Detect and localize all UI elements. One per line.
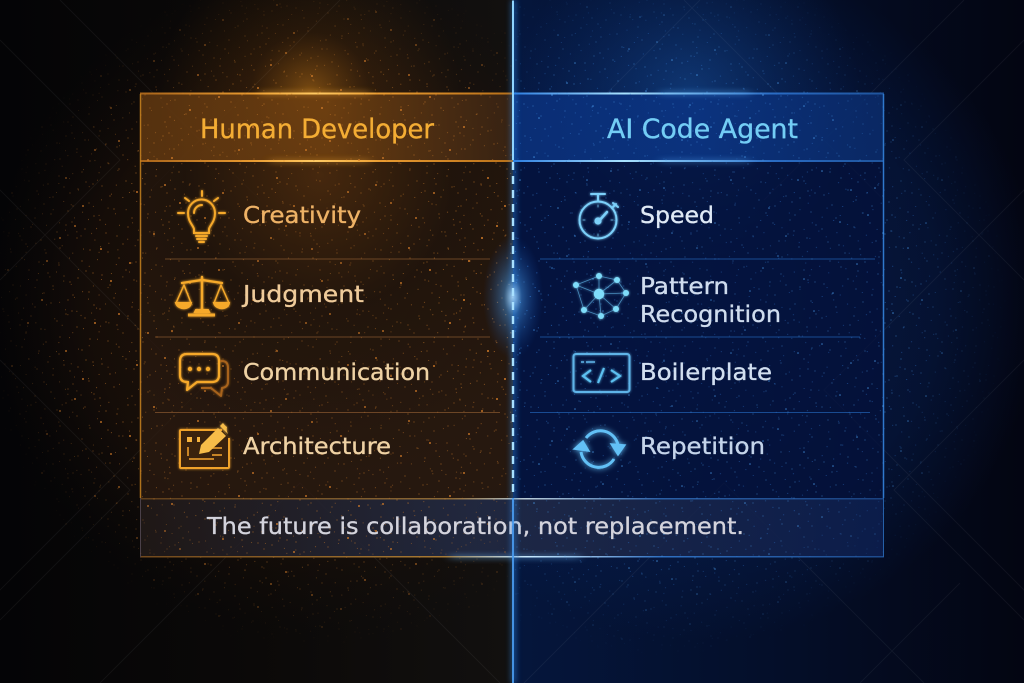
icon: code window — [574, 354, 630, 392]
icon: network nodes — [573, 273, 629, 319]
row: Boilerplate — [574, 354, 772, 392]
row: Repetition — [574, 431, 765, 467]
panel backgrounds: column fills, header bands and footer band — [140, 92, 884, 558]
icon: stopwatch — [580, 194, 618, 238]
label: Pattern: Pattern — [640, 272, 729, 300]
icon: cycle arrows — [574, 431, 625, 467]
row: Creativity — [178, 191, 361, 242]
label: Boilerplate: Boilerplate — [640, 358, 772, 386]
icon: blueprint and pencil — [180, 423, 229, 468]
label: Judgment: Judgment — [241, 280, 364, 308]
label: Recognition: Recognition — [640, 300, 781, 328]
icon: speech bubbles — [180, 354, 228, 396]
icon: scales — [176, 277, 229, 315]
footer text: The future is collaboration, not replacement. — [206, 514, 744, 540]
heading: Human Developer: Human Developer — [200, 114, 435, 145]
row: Judgment — [176, 277, 364, 315]
center divider line — [483, 0, 543, 683]
header band: AI code agent — [513, 92, 884, 162]
label: Architecture: Architecture — [243, 432, 391, 460]
row: Communication — [180, 354, 430, 396]
header band: human developer — [140, 92, 513, 162]
label: Creativity: Creativity — [243, 201, 361, 229]
label: Communication: Communication — [243, 358, 430, 386]
label: Repetition: Repetition — [640, 432, 765, 460]
footer band — [140, 498, 884, 558]
label: Speed: Speed — [640, 201, 714, 229]
row: Architecture — [180, 423, 391, 468]
panel: human developer column — [176, 114, 435, 468]
row: Pattern Recognition — [573, 272, 781, 328]
panel: AI code agent column — [573, 114, 798, 467]
heading: AI Code Agent: AI Code Agent — [607, 114, 798, 145]
row: Speed — [580, 194, 714, 238]
icon: lightbulb — [178, 191, 225, 242]
